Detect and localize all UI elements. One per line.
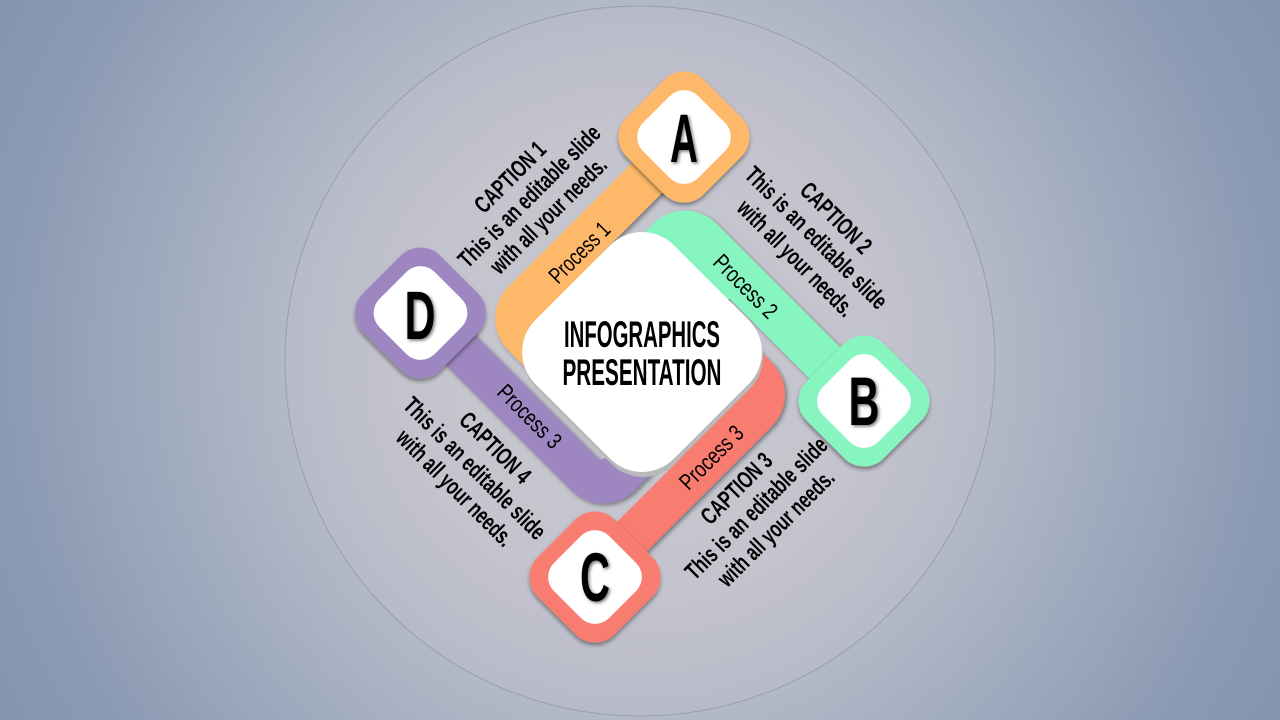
label: process 1: Process 1: [543, 216, 615, 288]
caption 2: [719, 142, 912, 335]
caption 1: with all your needs.: [484, 152, 613, 280]
caption 1: [434, 101, 625, 292]
label: process 2: Process 2: [708, 249, 783, 324]
caption 2: This is an editable slide: [739, 161, 893, 315]
label: process 3 red: Process 3: [674, 420, 749, 495]
node A: A: [670, 100, 698, 177]
node C: C: [580, 539, 610, 616]
node B: B: [848, 363, 880, 440]
caption 1: CAPTION 1: [469, 136, 552, 219]
center diamond: [503, 213, 782, 496]
caption 3: CAPTION 3: [695, 447, 778, 530]
node D: D: [404, 277, 436, 354]
bar: process 1 orange: [495, 153, 673, 402]
label: process 3 purple: Process 3: [492, 379, 567, 454]
node B: [787, 324, 941, 478]
caption 4: [378, 371, 572, 565]
node A: [607, 60, 761, 214]
caption 4: with all your needs.: [390, 424, 519, 552]
caption 3: This is an editable slide: [680, 432, 833, 585]
bar: process 2 green: [630, 211, 845, 387]
title: PRESENTATION: [562, 352, 722, 393]
background circle: [285, 6, 995, 716]
caption 2: CAPTION 2: [794, 177, 877, 260]
bar: process 3 red: [607, 336, 785, 560]
caption 4: This is an editable slide: [398, 392, 551, 545]
bar: process 4 purple: [437, 328, 655, 503]
caption 3: with all your needs.: [712, 464, 840, 593]
caption 2: with all your needs.: [731, 194, 859, 323]
node D: [343, 236, 498, 390]
node C: [518, 500, 672, 654]
caption 4: CAPTION 4: [453, 407, 537, 490]
title: INFOGRAPHICS: [564, 314, 720, 355]
caption 3: [660, 412, 853, 605]
caption 1: This is an editable slide: [453, 120, 606, 273]
title: [562, 314, 722, 393]
